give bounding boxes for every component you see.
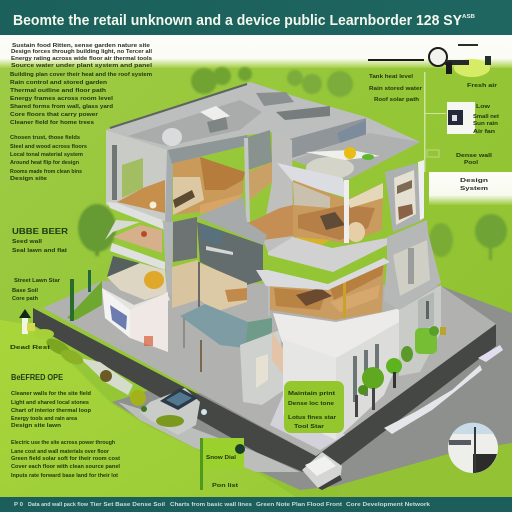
right text block centre: Rain stored water [369,86,423,92]
upper white band [277,163,347,198]
small green sign with stack: Pon list [212,483,238,489]
front wall left [283,339,336,440]
upper roof [106,82,420,180]
right text block centre: Roof solar path [374,97,420,103]
right lower labels: Pool [464,160,479,166]
white band under the header [0,34,512,68]
left text block 1: Rain control and stored garden [10,80,108,86]
right window icon with labels: Air fan [473,129,496,135]
roof white vents [200,106,230,121]
left text block 4 [11,440,120,479]
left text block 1: Energy frames across room level [10,96,114,102]
left text block 2: Rooms made from clean bins [10,169,82,175]
bush [44,335,72,359]
bush right [429,223,453,257]
left text block 1: Cleaner field for home trees [10,120,94,126]
mid tower top [197,197,267,245]
roof slots [256,92,294,106]
left text block 4: Cover each floor with clean source panel [11,464,120,470]
tree cluster top centre [287,70,353,97]
green wall panel [122,158,143,198]
roof surface right [292,133,420,180]
green lawn bottom right [336,443,512,497]
dome on right roof [306,157,354,179]
plaza highlights [270,395,345,450]
header bar [0,0,512,35]
small green sign with stack [200,438,245,490]
left text block 2: Chosen trust, those fields [10,135,80,141]
footer bar: Data and wall pack flow [28,502,88,508]
right tower room [248,162,272,200]
mid tower face [197,222,263,285]
entrance arch [240,330,284,405]
upper centre room [173,157,245,215]
left heading and labels: Seed wall [12,239,43,245]
shrub large [362,367,384,410]
upper tower box [286,118,366,158]
left text block 2 [10,135,87,182]
left heading and labels: UBBE BEER [12,227,68,236]
left text block 4: Electric use the site across power through [11,440,116,446]
dark left tower face [173,217,197,262]
inset circle [448,423,498,473]
green sign panel: front: Lotus fines star [288,415,337,421]
roof dome [162,128,182,146]
right lower labels [427,150,493,192]
upper front face [168,135,249,164]
green sign panel: front: Dense loc tone [288,401,334,407]
left text block 1: Shared forms from wall, glass yard [10,104,113,110]
small green sign with stack: Snow Dial [206,455,237,461]
right tower face [245,130,272,170]
lower left room [105,220,165,270]
green sign panel: front [284,381,344,433]
white band on the right [429,172,512,205]
green hedge [415,328,437,354]
right wing [399,285,441,376]
tree left of building [78,204,116,256]
left text block 1: Building plan cover their heat and the roof system [10,72,152,78]
white roof blade [305,150,380,160]
white lamp [150,202,156,208]
water [80,358,133,395]
roof dark vent [207,117,228,133]
left text block 2: Design site [10,176,47,182]
grey link wall [262,132,293,252]
light sweep beside the road [118,402,300,472]
platform top [43,281,496,456]
shrub small [355,385,368,417]
footer bar: P 0 [14,502,23,508]
left text block 2: Steel and wood across floors [10,144,87,150]
glass pavilion [180,304,272,372]
yellow lamp [344,147,356,159]
right lower labels: System [460,186,488,192]
lower centre room [172,260,247,312]
title: Beomte the retail unknown and a device public Learnborder 128 SY [13,12,462,29]
left text block 3: Energy tools and rain area [11,416,78,422]
footer bar: Core Development Network [346,502,430,508]
dark left column [112,145,117,200]
left text block 3 [11,373,92,429]
left text block 1: Source water under plant system and panel [11,63,153,69]
left text block 3: Chart of interior thermal loop [11,408,92,414]
green lawn bottom left [0,320,296,497]
left heading and labels: Base Soil [12,288,38,294]
right lower labels: Dense wall [456,153,493,159]
roof dark rim [110,84,247,128]
left heading and labels: Dead Rest [10,345,50,351]
left heading and labels: Street Lawn Star [14,278,61,284]
small shrub [429,326,439,336]
platform side band [33,308,496,480]
left text block 3: Cleaner walls for the site field [11,391,91,397]
right callout icon top [368,44,491,77]
footer bar: Charts from basic wall lines [170,502,252,508]
tower bar [206,246,233,255]
lower left white box [102,288,170,352]
tree behind roof left [191,67,252,94]
white wall with top surface [273,308,417,358]
car headlamp [201,409,207,415]
rock [100,370,112,382]
roof recess [128,100,262,146]
shrub right [401,346,413,362]
lower left lower room [107,256,167,300]
left text block 4: Lane cost and wall materials over floor [11,449,110,455]
grey truck at the front corner [302,452,342,490]
footer bar: Green Note Plan Flood Front [256,502,342,508]
main warm room [293,180,383,246]
outer grey road [112,286,512,490]
background trees [78,67,507,260]
left text block 3: BeEFRED OPE [11,373,64,382]
left text block 1: Energy rating across wide floor air thermal tools [11,56,152,62]
wall slats [353,344,379,402]
right text block centre: Tank heat level [369,74,414,80]
left text block 3: Light and shared local stones [11,400,89,406]
title superscript: ASB [462,14,475,20]
right callout with lines [424,72,498,172]
left heading and labels: Seal lawn and flat [12,248,67,254]
tree [386,358,402,388]
left text block 3: Design site lawn [11,423,62,429]
building [102,82,441,440]
tree far right [475,214,507,260]
green roof accent [362,154,374,160]
tower right [385,160,424,232]
left text block 4: Green field solar soft for their room cost [11,456,120,462]
front wall right [336,322,399,440]
green post gadget left [19,270,102,334]
left text block 1: Thermal outline and floor path [10,88,107,94]
yellow tag [440,327,446,335]
right callout with lines: Fresh air [467,83,498,89]
right window icon with labels [447,102,499,135]
front column [165,150,173,224]
right window icon with labels: Low [476,104,491,110]
wall front of room [344,180,349,243]
solar panels on road [384,345,503,434]
left text block 2: Around heat flip for design [10,160,80,166]
left text block 1 [10,43,153,126]
ground: road and plaza [0,281,512,497]
left text block 4: Inputs rate forward base land for their lot [11,473,118,479]
roof pool [337,120,366,143]
green sign panel: front: Maintain print [288,391,335,397]
left heading and labels [10,227,68,351]
tower screen [201,224,222,246]
green sign panel: front: Tool Star [294,424,325,430]
footer bar [0,497,512,512]
lower tower right [384,220,441,310]
orange floor [117,180,165,213]
slab above lower room [256,258,390,290]
left text block 2: Local tonal material system [10,152,83,158]
orange curved floor [248,205,293,240]
left text block 1: Core floors that carry power [10,112,99,118]
right window icon with labels: Sun rain [473,121,499,127]
right text block centre [369,74,423,103]
car [140,388,207,435]
bush [130,390,146,406]
left text block 1: Design forces through building light, no Tercer all [11,49,153,55]
left heading and labels: Core path [12,296,39,302]
lower warm room [268,260,384,320]
tower column [244,138,250,222]
left text block 1: Sustain food Ritten, sense garden nature site [12,43,150,49]
right lower labels: Design [460,178,489,184]
white slab under left room [107,202,165,230]
green front plants [355,326,446,417]
upper left room [106,130,168,222]
main slab [268,237,387,272]
left stream with plants [34,329,146,406]
left pillar [163,222,173,294]
footer bar: Tier Set Base Dense Soil [90,502,166,508]
bush [34,329,54,339]
bush [59,346,85,368]
right window icon with labels: Small net [473,114,499,120]
